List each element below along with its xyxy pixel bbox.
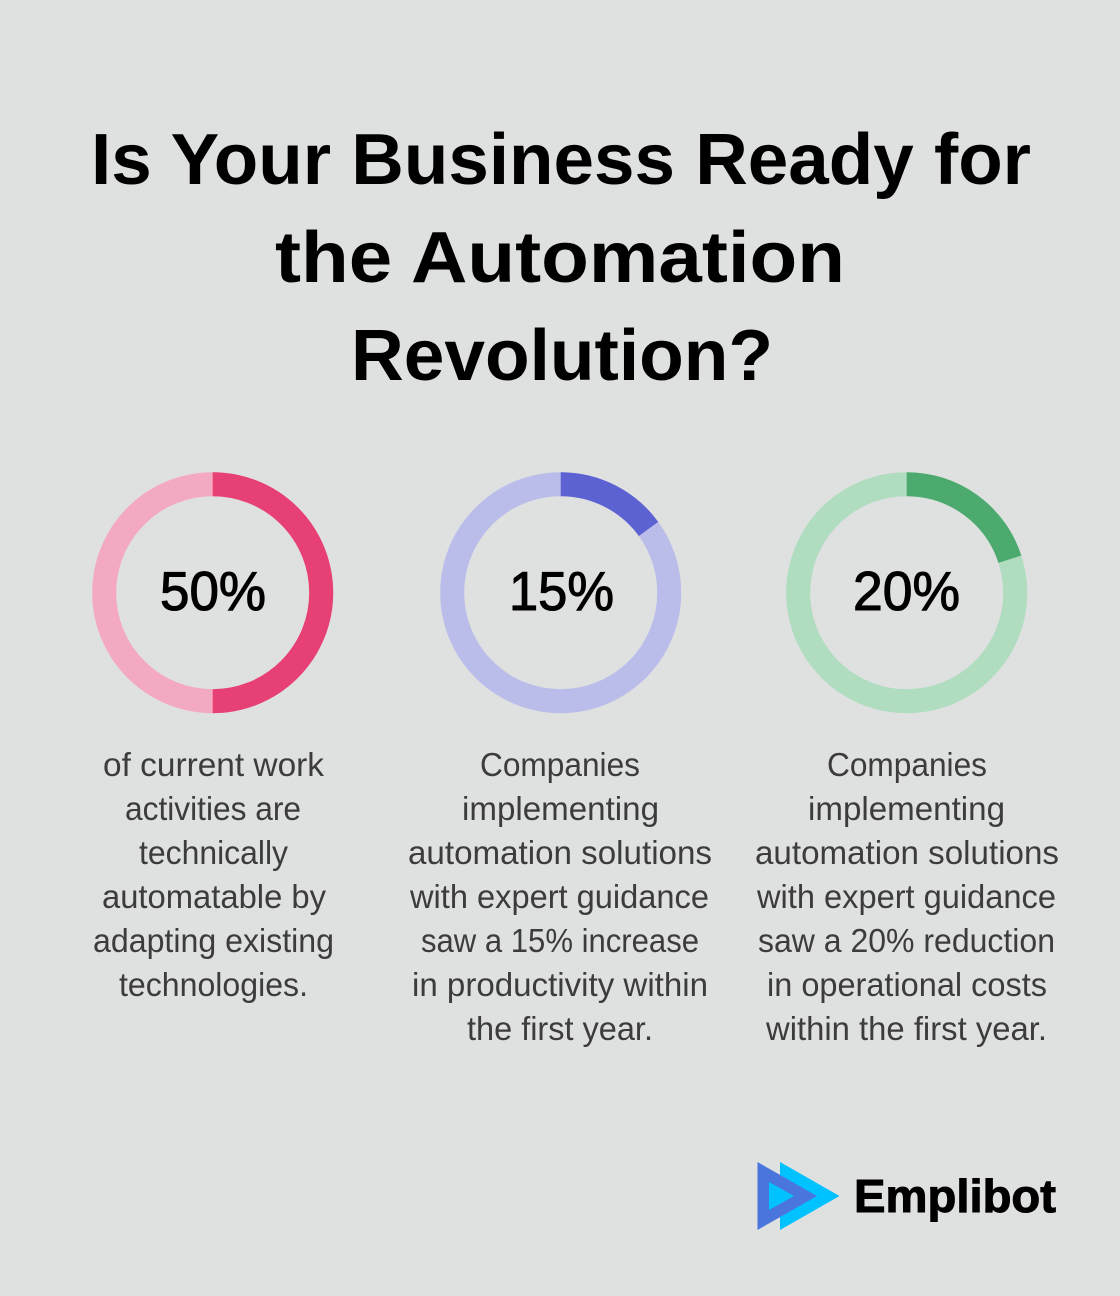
text: 15% description: implementing	[462, 790, 659, 827]
text: 50% description: activities are	[125, 790, 301, 827]
text: 20% description	[755, 746, 1059, 1047]
text: 20% description: within the first year.	[765, 1010, 1047, 1047]
title: the Automation	[275, 218, 845, 298]
panel: 50% stat	[93, 484, 334, 1003]
text: 20% description: saw a 20% reduction	[758, 922, 1055, 959]
donut chart: 20%	[798, 484, 1015, 701]
panel: 20% stat	[755, 484, 1059, 1047]
text: 15% description: in productivity within	[412, 966, 708, 1003]
text: 20% description: in operational costs	[767, 966, 1047, 1003]
text: 50% description: technically	[139, 834, 288, 871]
text: 20% description: automation solutions	[755, 834, 1059, 871]
text: 15% description: saw a 15% increase	[421, 922, 699, 959]
donut chart: 15%: 15%	[509, 560, 614, 622]
text: 20% description: implementing	[808, 790, 1005, 827]
text: 50% description	[93, 746, 334, 1003]
text: 50% description: of current work	[103, 746, 324, 783]
text: 15% description: with expert guidance	[409, 878, 709, 915]
logo: Emplibot	[758, 1162, 1056, 1230]
text: 15% description	[408, 746, 712, 1047]
title	[91, 120, 1031, 396]
donut chart: 20%: 20%	[853, 560, 960, 622]
donut chart: 50%: 50%	[160, 560, 266, 622]
text: 15% description: the first year.	[467, 1010, 653, 1047]
donut chart: 15%	[452, 484, 669, 701]
panel: 15% stat	[408, 484, 712, 1047]
text: 15% description: Companies	[480, 746, 640, 783]
logo wordmark: Emplibot	[854, 1170, 1056, 1222]
text: 20% description: Companies	[827, 746, 987, 783]
text: 50% description: automatable by	[102, 878, 326, 915]
donut chart: 50%	[104, 484, 321, 701]
text: 20% description: with expert guidance	[756, 878, 1056, 915]
title: Is Your Business Ready for	[91, 120, 1031, 200]
icon: play triangles	[758, 1162, 840, 1230]
text: 50% description: adapting existing	[93, 922, 334, 959]
title: Revolution?	[351, 316, 773, 396]
text: 15% description: automation solutions	[408, 834, 712, 871]
text: 50% description: technologies.	[119, 966, 308, 1003]
